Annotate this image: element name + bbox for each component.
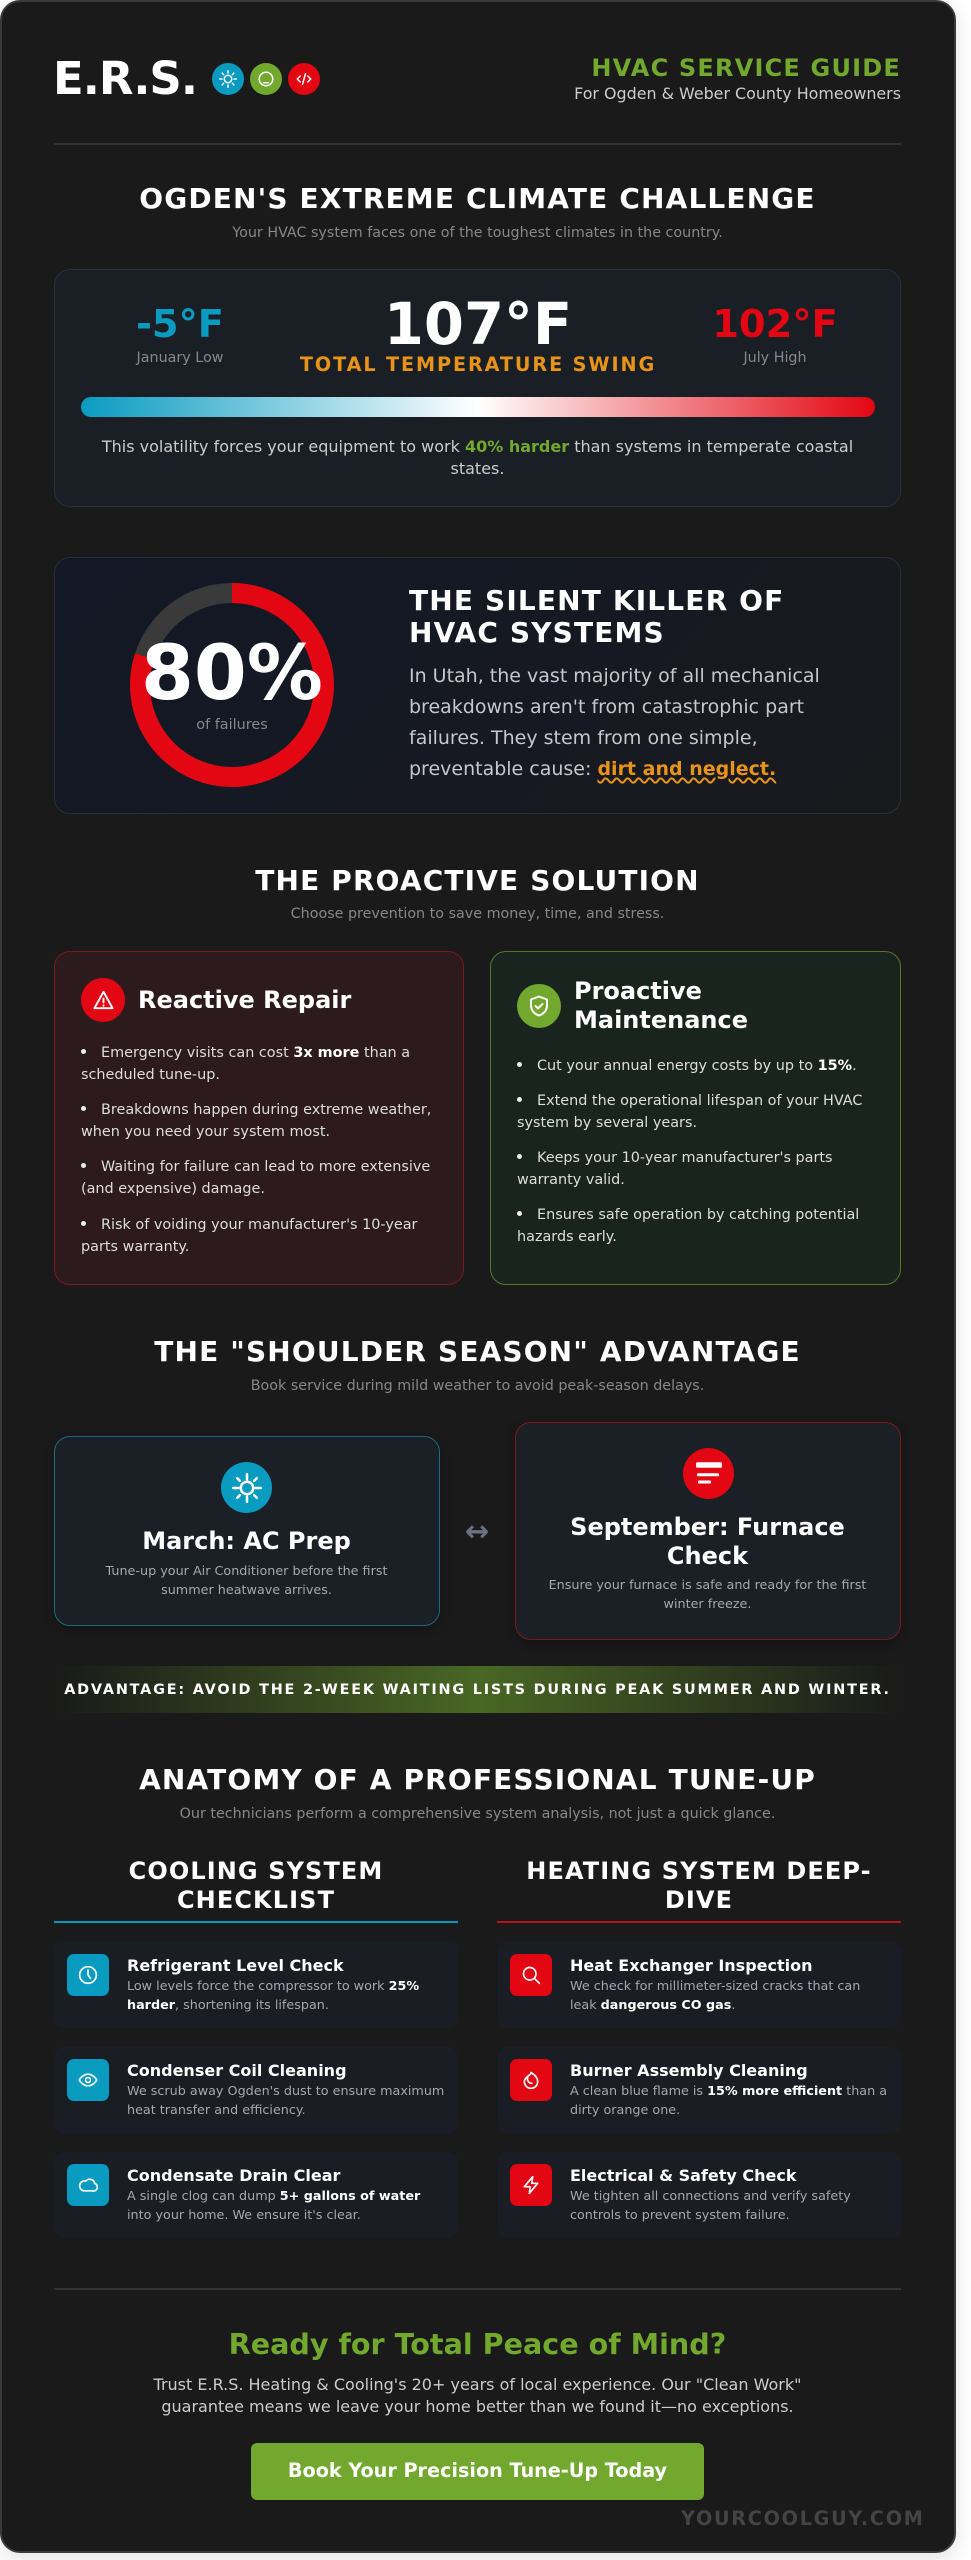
description [570,2084,887,2118]
bullet 1: Cut your annual energy costs by up to 15%. [537,1058,857,1074]
bullet 2 [81,1102,431,1140]
silent killer body [409,665,820,784]
proactive subtitle: Choose prevention to save money, time, and stress. [291,906,664,922]
title: Refrigerant Level Check [127,1956,344,1974]
description [127,2084,444,2118]
description: A single clog can dump 5+ gallons of water [127,2189,420,2204]
bullet 2: when you need your system most. [81,1124,330,1140]
bullet 2: system by several years. [517,1115,697,1131]
call to action text: guarantee means we leave your home better than we found it—no exceptions. [161,2397,794,2416]
description [570,1979,860,2013]
panel: march ac prep [54,1436,440,1626]
title: Condenser Coil Cleaning [127,2060,347,2080]
advantage banner: ADVANTAGE: AVOID THE 2-WEEK WAITING LISTS DURING PEAK SUMMER AND WINTER. [64,1682,891,1698]
bullet 3: Waiting for failure can lead to more extensive [101,1159,430,1175]
description: We tighten all connections and verify safety [570,2189,851,2204]
header: guide subtitle: For Ogden & Weber County Homeowners [574,84,901,103]
proactive title: Proactive [574,977,702,1005]
bullet 4: hazards early. [517,1229,617,1245]
bullet 1 [81,1045,410,1083]
call to action text [153,2375,801,2416]
proactive title: Maintenance [574,1006,748,1034]
heading: shoulder season: THE "SHOULDER SEASON" ADVANTAGE [154,1335,801,1368]
silent killer body: preventable cause: dirt and neglect. [409,758,776,780]
column heading: cooling [54,1857,458,1923]
item: condensate drain clear [54,2152,458,2238]
panel: reactive repair [54,951,464,1285]
silent killer body: In Utah, the vast majority of all mechanical [409,665,820,687]
september title [570,1513,845,1570]
volatility note: states. [451,459,504,478]
item: burner assembly cleaning [497,2047,901,2133]
stat: january low: -5°F [136,302,224,347]
silent killer title: HVAC SYSTEMS [409,616,665,649]
description: A clean blue flame is 15% more efficient than a [570,2084,887,2099]
climate subtitle: Your HVAC system faces one of the toughest climates in the country. [232,225,723,241]
advantage banner [54,1666,901,1713]
description: heat transfer and efficiency. [127,2103,306,2118]
volatility note [102,436,853,478]
anatomy subtitle: Our technicians perform a comprehensive system analysis, not just a quick glance. [180,1806,775,1822]
silent killer body: failures. They stem from one simple, [409,727,758,749]
logo wordmark: E.R.S. [53,52,197,105]
call to action heading: Ready for Total Peace of Mind? [229,2327,726,2361]
label: total swing: TOTAL TEMPERATURE SWING [300,353,656,376]
panel: september furnace check [515,1422,901,1640]
header: logo [53,52,320,105]
bullet 3 [81,1159,430,1197]
september description: Ensure your furnace is safe and ready for the first [549,1578,866,1593]
stat: july high: 102°F [712,302,838,347]
item: condenser coil cleaning [54,2047,458,2133]
march description [105,1564,388,1598]
label: july high: July High [743,350,807,366]
title: Condensate Drain Clear [127,2166,340,2184]
icon: gauge clock [67,1954,109,1996]
reactive title: Reactive Repair [138,986,351,1014]
silent killer title: THE SILENT KILLER OF [409,584,784,617]
heading: anatomy of a tune-up: ANATOMY OF A PROFESSIONAL TUNE-UP [139,1763,816,1796]
arrow: between seasons: ↔ [465,1514,489,1548]
proactive list [517,1058,862,1245]
item: heat exchanger inspection [497,1942,901,2028]
icon: furnace lines [683,1448,734,1499]
bullet 4: parts warranty. [81,1239,189,1255]
icon: sun [221,1462,272,1513]
bullet 2 [517,1092,862,1131]
watermark: YOURCOOLGUY.COM [681,2507,925,2530]
description: leak dangerous CO gas. [570,1998,735,2013]
icon: cloud [67,2164,109,2206]
icon: bolt [510,2164,552,2206]
bullet 1: scheduled tune-up. [81,1067,220,1083]
description: We scrub away Ogden's dust to ensure maximum [127,2084,444,2099]
title: Heat Exchanger Inspection [570,1956,813,1974]
donut value: 80% [141,628,323,717]
bullet 3: (and expensive) damage. [81,1181,265,1197]
description: harder, shortening its lifespan. [127,1998,329,2013]
september description: winter freeze. [664,1597,751,1612]
icon: code [288,63,320,95]
silent killer title [409,584,784,649]
bullet 4: Risk of voiding your manufacturer's 10-year [101,1216,417,1232]
september description [549,1578,866,1612]
column heading: heating: DIVE [665,1886,733,1914]
description: into your home. We ensure it's clear. [127,2208,361,2223]
item: electrical and safety check [497,2152,901,2238]
volatility note: This volatility forces your equipment to work 40% harder than systems in temperate coastal [102,436,853,456]
icon: flame [510,2059,552,2101]
icon: shield check [517,984,561,1028]
stat: total swing: 107°F [384,291,572,358]
temperature gradient bar [81,397,875,417]
call to action button [251,2443,704,2500]
description: We check for millimeter-sized cracks that can [570,1979,860,1994]
september title: September: Furnace [570,1513,845,1541]
reactive list [81,1045,431,1255]
september title: Check [667,1542,748,1570]
description: controls to prevent system failure. [570,2208,790,2223]
shoulder subtitle: Book service during mild weather to avoid peak-season delays. [251,1378,704,1394]
icon: magnifier [510,1954,552,1996]
proactive title [574,977,748,1034]
bullet 4: Ensures safe operation by catching potential [537,1207,859,1223]
title: Burner Assembly Cleaning [570,2060,808,2080]
bullet 4 [81,1216,418,1255]
title: Electrical & Safety Check [570,2166,797,2184]
header: guide title: HVAC SERVICE GUIDE [591,54,901,82]
march description: Tune-up your Air Conditioner before the first [106,1564,387,1579]
bullet 3: Keeps your 10-year manufacturer's parts [537,1150,833,1166]
heading: proactive solution: THE PROACTIVE SOLUTION [255,864,700,897]
bullet 2: Breakdowns happen during extreme weather, [101,1102,431,1118]
column heading: heating: HEATING SYSTEM DEEP- [526,1857,872,1885]
donut caption: of failures [196,717,268,733]
column heading: heating [497,1857,901,1923]
call to action button: Book Your Precision Tune-Up Today [288,2459,667,2482]
panel: proactive maintenance [490,951,901,1285]
bullet 3: warranty valid. [517,1172,625,1188]
bullet 1: Emergency visits can cost 3x more than a [101,1045,410,1061]
heading: climate challenge: OGDEN'S EXTREME CLIMATE CHALLENGE [139,182,816,215]
icon: sun [212,63,244,95]
silent killer body: breakdowns aren't from catastrophic part [409,696,804,718]
icon: warning triangle [81,978,125,1022]
description: dirty orange one. [570,2103,680,2118]
march description: summer heatwave arrives. [161,1583,332,1598]
call to action text: Trust E.R.S. Heating & Cooling's 20+ years of local experience. Our "Clean Work" [154,2375,801,2394]
column heading: cooling: COOLING SYSTEM [129,1857,383,1885]
bullet 2: Extend the operational lifespan of your HVAC [537,1092,862,1108]
description [570,2189,851,2223]
bullet 4 [517,1207,859,1245]
description [127,1979,419,2013]
panel: silent killer [54,557,901,814]
panel: temperature swing [54,269,901,507]
donut chart: 80 percent [130,583,334,787]
bullet 3 [517,1150,833,1188]
description: Low levels force the compressor to work 25% [127,1979,419,1994]
icon: eye [67,2059,109,2101]
column heading: cooling: CHECKLIST [177,1886,335,1914]
description [127,2189,420,2223]
icon: circle [250,63,282,95]
march title: March: AC Prep [142,1527,351,1555]
label: january low: January Low [137,350,223,366]
item: refrigerant level check [54,1942,458,2028]
